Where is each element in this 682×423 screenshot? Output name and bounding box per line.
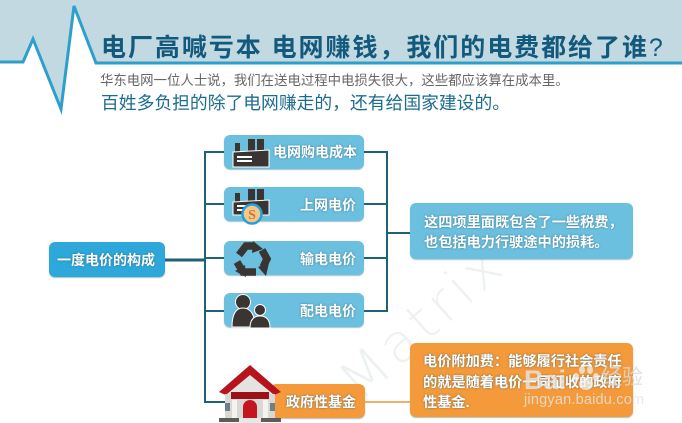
box: 输电电价: 输电电价	[300, 251, 356, 267]
icon: factory with coin: S	[248, 208, 256, 223]
icon: factory with coin	[232, 189, 270, 225]
icon: paw	[573, 366, 599, 390]
box: 配电电价: 配电电价	[300, 303, 356, 319]
icon: government building	[219, 365, 281, 423]
intro text line: 华东电网一位人士说，我们在送电过程中电损失很大，这些都应该算在成本里。	[100, 73, 569, 88]
box: 配电电价	[224, 293, 364, 327]
note box: orange: 电价附加费：能够履行社会责任	[423, 354, 622, 370]
watermark: Baidu jingyan: Bai	[524, 365, 566, 395]
box: 电网购电成本	[224, 135, 364, 169]
note box: orange: 的就是随着电价一同征收的政府	[423, 374, 622, 390]
note box: blue: 这四项里面既包含了一些税费，	[424, 215, 623, 231]
icon: people	[232, 294, 270, 328]
root box: 一度电价的构成: 一度电价的构成	[57, 252, 155, 268]
watermark: Baidu jingyan	[524, 365, 644, 408]
title: 电厂高喊亏本 电网赚钱，我们的电费都给了谁?	[101, 34, 665, 62]
box: 上网电价: 上网电价	[300, 197, 356, 213]
watermark: Matrix: Matrix	[327, 232, 518, 412]
note box: blue	[410, 203, 633, 259]
note box: blue: 也包括电力行驶途中的损耗。	[424, 235, 608, 251]
box: 输电电价	[224, 241, 364, 275]
highlighted intro line: 百姓多负担的除了电网赚走的，还有给国家建设的。	[101, 93, 510, 113]
root box: 一度电价的构成	[49, 242, 165, 277]
box: 上网电价	[224, 187, 364, 221]
box: 电网购电成本: 电网购电成本	[273, 144, 357, 160]
box: 政府性基金: 政府性基金	[286, 394, 356, 410]
icon: recycle	[234, 241, 272, 277]
note box: orange	[410, 343, 633, 417]
icon: factory	[232, 139, 270, 168]
box: 政府性基金	[270, 384, 365, 418]
note box: orange: 性基金.	[423, 395, 470, 411]
watermark: Baidu jingyan: 经验	[601, 366, 643, 389]
watermark: Baidu jingyan: jingyan.baidu.com	[524, 392, 644, 408]
